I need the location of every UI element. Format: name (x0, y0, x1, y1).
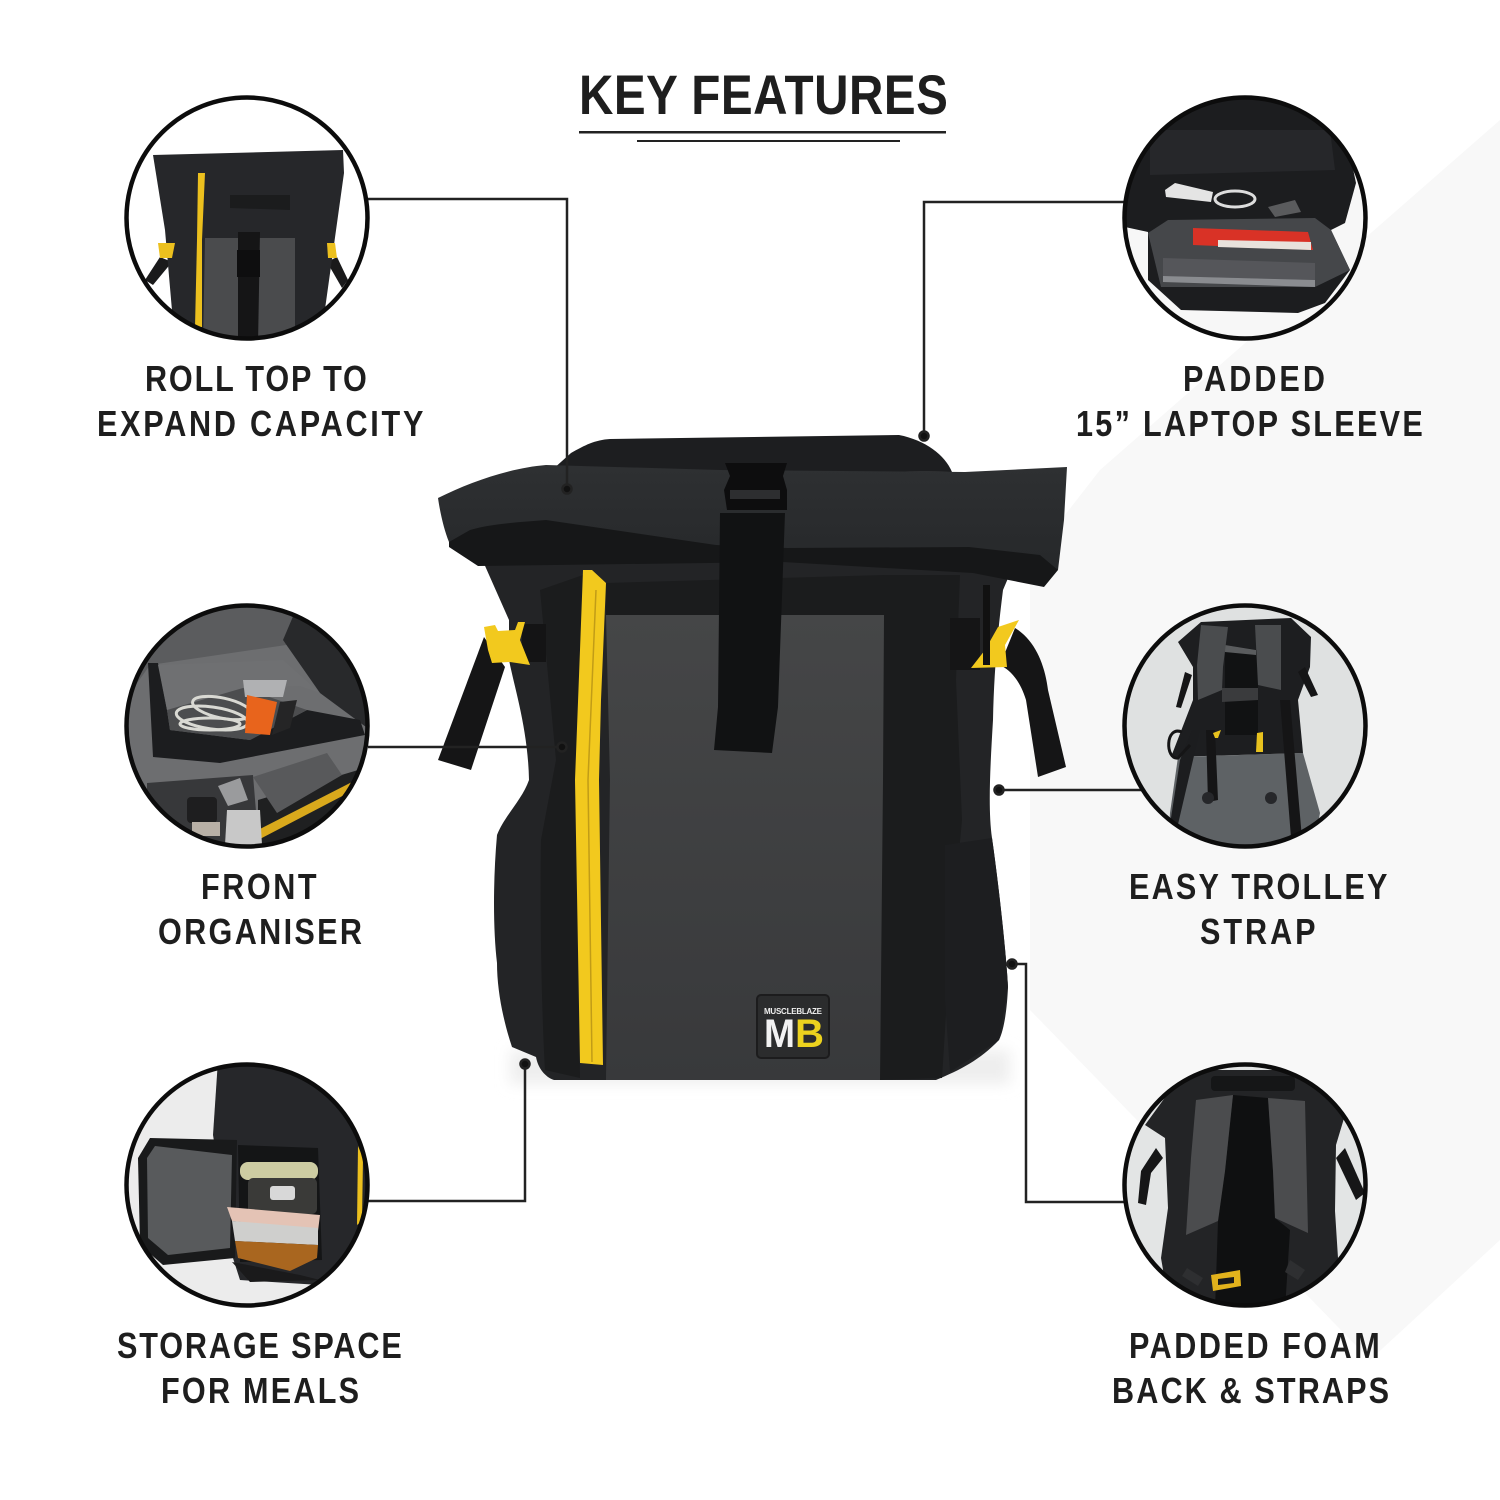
logo badge: MUSCLEBLAZE (764, 1007, 823, 1016)
circle outlines (126, 98, 1366, 1306)
ground shadow (510, 1050, 1010, 1084)
roll top flap (438, 465, 1067, 570)
connector: meals (368, 1060, 530, 1201)
left yellow buckle (484, 622, 546, 665)
label: front organiser: ORGANISER (158, 913, 362, 953)
backpack (438, 435, 1067, 1084)
icon: trolley strap photo (1126, 608, 1364, 844)
side pocket right (945, 838, 1008, 1072)
label: meals (117, 1327, 402, 1412)
label: roll top: ROLL TOP TO (145, 360, 367, 400)
label: padded foam (1112, 1327, 1389, 1412)
roll top lower band (449, 510, 1058, 587)
logo badge: M (764, 1012, 795, 1056)
icon: roll top photo (146, 150, 348, 336)
label: laptop sleeve: 15” LAPTOP SLEEVE (1076, 405, 1423, 445)
label: front organiser: FRONT (201, 868, 317, 908)
label: padded foam: BACK & STRAPS (1112, 1372, 1389, 1412)
label: trolley strap: EASY TROLLEY (1129, 868, 1387, 908)
connector: foam (1008, 960, 1124, 1202)
label: roll top (97, 360, 423, 445)
icon: front organiser photo (128, 608, 366, 844)
label: laptop sleeve (1076, 360, 1423, 445)
yellow zipper stripe (575, 570, 606, 1065)
icon: meal storage photo (128, 1066, 366, 1304)
label: meals: STORAGE SPACE (117, 1327, 402, 1367)
label: laptop sleeve: PADDED (1183, 360, 1325, 400)
label: front organiser (158, 868, 362, 953)
label: trolley strap: STRAP (1200, 913, 1316, 953)
roll top rear (552, 435, 952, 472)
icon: padded foam photo (1126, 1066, 1364, 1304)
front panel (606, 615, 884, 1080)
left side strap (438, 637, 505, 770)
logo badge (757, 995, 829, 1058)
icon: laptop sleeve photo (1126, 100, 1356, 313)
zipper groove (588, 590, 596, 1062)
side fabric inner dark (540, 575, 962, 1080)
label: trolley strap (1129, 868, 1387, 953)
connector: trolley (994, 786, 1144, 794)
title: KEY FEATURES (579, 64, 948, 127)
label: meals: FOR MEALS (161, 1372, 359, 1412)
label: padded foam: PADDED FOAM (1129, 1327, 1380, 1367)
connector: front organiser (368, 742, 566, 752)
right yellow buckle (950, 585, 1019, 670)
right side strap (1000, 628, 1066, 777)
buckle (724, 463, 787, 510)
logo badge: B (795, 1012, 824, 1056)
label: roll top: EXPAND CAPACITY (97, 405, 423, 445)
bag body (478, 550, 1020, 1080)
connector: laptop (920, 202, 1124, 440)
upper fabric band (606, 575, 884, 615)
buckle strap (714, 513, 785, 753)
connector: roll top (368, 199, 572, 494)
